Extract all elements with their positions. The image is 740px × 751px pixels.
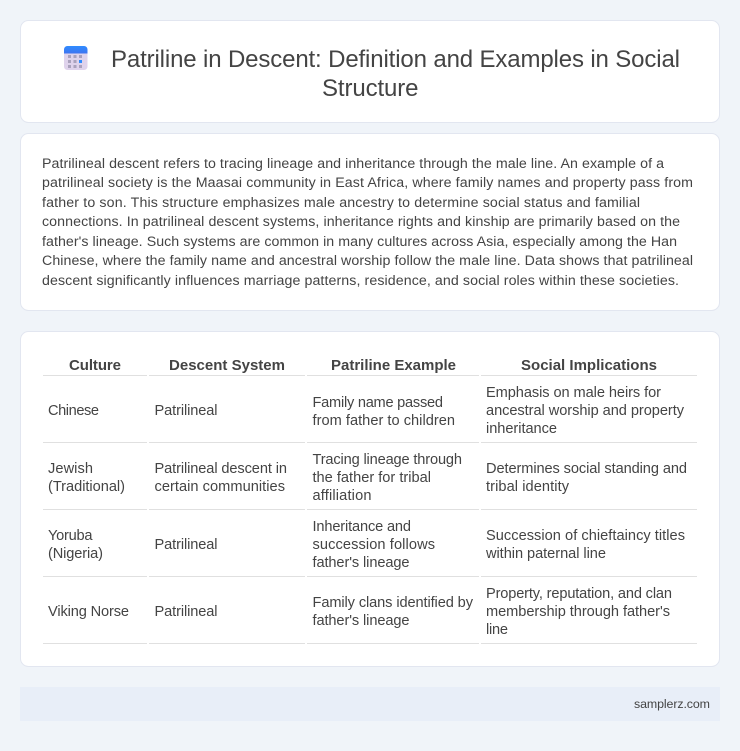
title (111, 46, 680, 102)
title: Patriline in Descent: Definition and Examples in Social (111, 46, 680, 73)
table row: Jewish: tribal identity (486, 479, 570, 495)
table row: Jewish: affiliation (312, 488, 372, 504)
table row: Yoruba: (Nigeria) (48, 546, 103, 562)
table row: Viking Norse: Viking Norse (48, 604, 129, 620)
table row: Chinese: Patrilineal (154, 403, 218, 419)
table row: Chinese: Chinese (48, 403, 99, 419)
table row: Chinese: Family name passed (312, 395, 443, 411)
table row: Yoruba: Patrilineal (154, 537, 218, 553)
text block: description (42, 156, 693, 289)
table row: Jewish: (Traditional) (48, 479, 125, 495)
table header (69, 357, 657, 374)
table row: Chinese: Emphasis on male heirs for (486, 385, 661, 401)
text block: description: father's lineage. Such systems are common in many cultures across Asia, especially among the Han (42, 234, 677, 250)
table row: Jewish: Tracing lineage through (312, 452, 462, 468)
text block: description: Chinese, where the family name and ancestral worship follow the male line. Data shows that patrilineal (42, 253, 693, 269)
text block: description: father to son. This structure emphasizes male ancestry to determine social status and familial (42, 195, 640, 211)
text block: description: descent significantly influences marriage patterns, residence, and social roles within these societies. (42, 273, 679, 289)
table row: Yoruba: Yoruba (48, 528, 93, 544)
table header: Descent System (169, 357, 285, 374)
table row: Yoruba (48, 519, 685, 571)
table row: Jewish: Jewish (48, 461, 93, 477)
text block: description: patrilineal society is the Maasai community in East Africa, where family names and property pass from (42, 175, 693, 191)
table header: Social Implications (521, 357, 657, 374)
table row: Viking Norse: Patrilineal (154, 604, 218, 620)
table row: Yoruba: within paternal line (485, 546, 606, 562)
table row: Chinese: inheritance (486, 421, 557, 437)
table row: Chinese (48, 385, 685, 437)
table row: Viking Norse: Property, reputation, and clan (486, 586, 672, 602)
footer: samplerz.com (634, 697, 710, 711)
table row: Viking Norse: membership through father's (486, 604, 670, 620)
table row: Viking Norse: line (486, 622, 508, 638)
table row: Yoruba: succession follows (312, 537, 435, 553)
table row: Jewish: certain communities (154, 479, 285, 495)
table row: Jewish: Determines social standing and (486, 461, 687, 477)
table row: Yoruba: father's lineage (312, 555, 410, 571)
table row: Jewish (48, 452, 687, 504)
panel: intro paragraph (20, 134, 720, 310)
title: Structure (322, 75, 418, 102)
panel: culture table (20, 332, 720, 666)
panel: title card (20, 20, 720, 122)
table row: Viking Norse: father's lineage (312, 613, 410, 629)
footer (20, 687, 720, 721)
table header: Patriline Example (331, 357, 456, 374)
text block: description: Patrilineal descent refers to tracing lineage and inheritance through the male line. An example of a (42, 156, 664, 172)
table row: Jewish: Patrilineal descent in (154, 461, 287, 477)
text block: description: connections. In patrilineal descent systems, inheritance rights and kinship are primarily based on the (42, 214, 680, 230)
table row: Yoruba: Succession of chieftaincy titles (486, 528, 685, 544)
table header: Culture (69, 357, 121, 374)
table row: Yoruba: Inheritance and (312, 519, 411, 535)
table row: Viking Norse: Family clans identified by (312, 595, 474, 611)
table row: Chinese: ancestral worship and property (486, 403, 685, 419)
table row: Jewish: the father for tribal (312, 470, 431, 486)
table row: Viking Norse (48, 586, 672, 638)
icon: calendar (64, 46, 88, 70)
table row: Chinese: from father to children (312, 413, 455, 429)
